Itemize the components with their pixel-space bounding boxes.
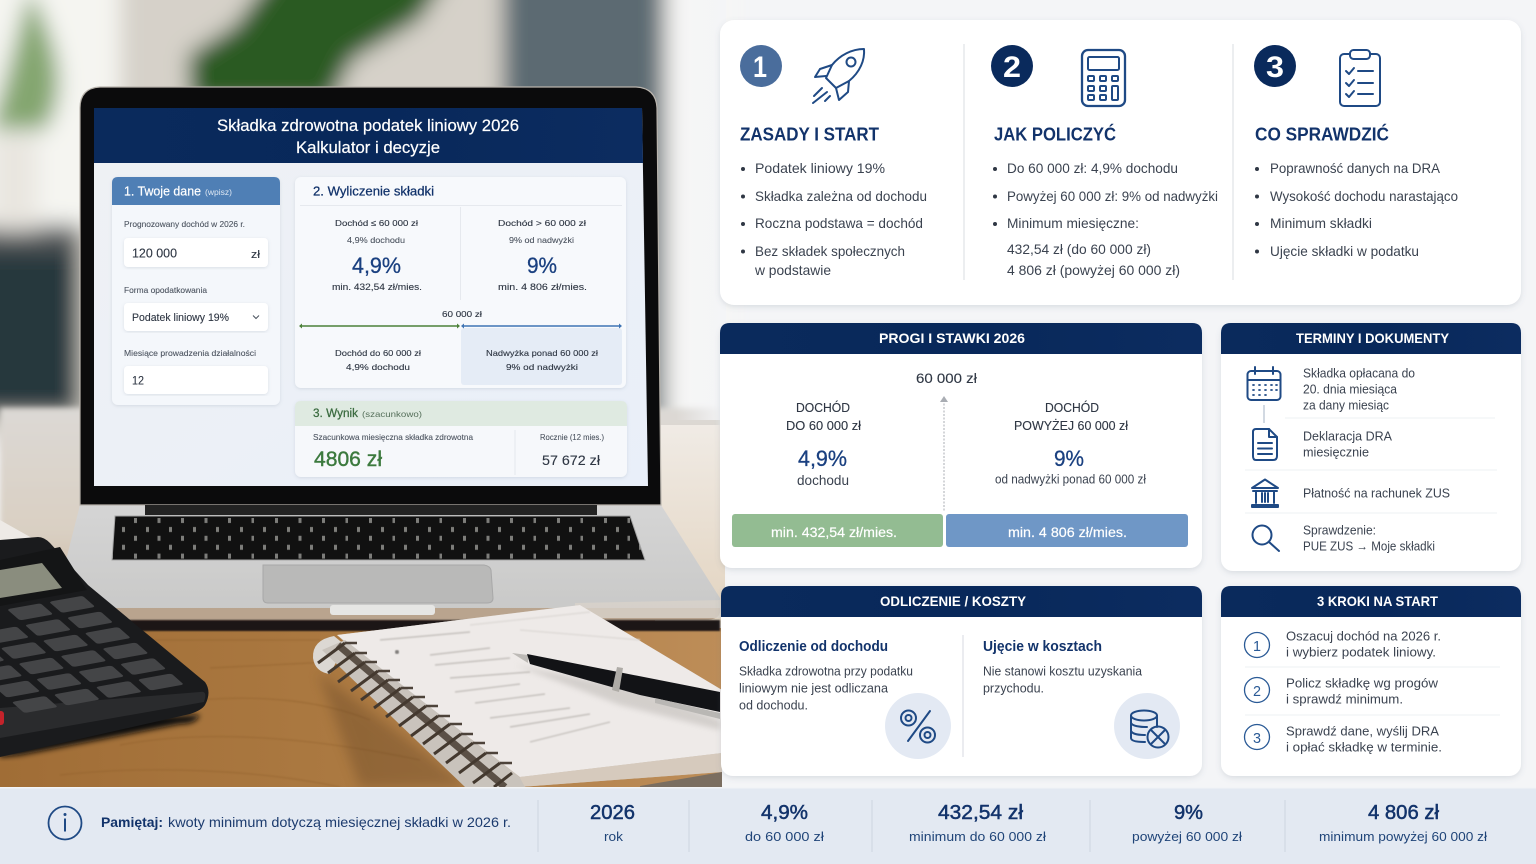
screen panel 3: result: 3. Wynik — [313, 408, 358, 420]
stat: 432,54 zł: 432,54 zł — [938, 802, 1024, 824]
stat: 4,9% — [745, 802, 824, 844]
photo right fade — [676, 0, 726, 420]
screen panel 3: result: 57 672 zł — [542, 452, 601, 468]
column 1: rules and start: ZASADY I START — [740, 124, 879, 144]
screen panel 2: calculation — [295, 177, 626, 388]
screen panel 2: calculation: 4,9% — [352, 253, 401, 278]
laptop — [66, 87, 722, 631]
column 1: rules and start: Roczna podstawa = dochód — [755, 215, 923, 231]
screen panel 2: calculation: 9% — [527, 253, 557, 278]
icon: document — [1253, 429, 1277, 460]
photo: blurred room background — [0, 0, 738, 450]
panel: thresholds and rates: DO 60 000 zł — [786, 418, 861, 433]
photo: table top — [0, 408, 720, 638]
screen panel 3: result: Szacunkowa miesięczna składka zdrowotna — [313, 433, 474, 442]
icon: percent — [885, 693, 951, 759]
column 3: what to check: Ujęcie składki w podatku — [1270, 243, 1419, 259]
screen panel 2: calculation: 9% od nadwyżki — [509, 236, 574, 245]
keyboard — [112, 516, 645, 560]
screen panel 1: your data: Forma opodatkowania — [124, 286, 208, 295]
column 1: rules and start: Bez składek społecznych — [755, 243, 905, 259]
bottom summary bar — [0, 787, 1536, 864]
step 2: i sprawdź minimum. — [1286, 692, 1403, 706]
panel: deduction and costs: od dochodu. — [739, 698, 808, 712]
screen panel 1: your data: Prognozowany dochód w 2026 r. — [124, 220, 245, 229]
column 3: what to check: Minimum składki — [1270, 215, 1372, 231]
panel: thresholds and rates: dochodu — [797, 472, 849, 488]
stat: 4,9%: 4,9% — [761, 802, 808, 824]
panel: deadlines and documents: PUE ZUS → Moje składki — [1303, 540, 1435, 554]
step 3: 3 — [1253, 730, 1261, 747]
stat: 4,9%: do 60 000 zł — [745, 829, 824, 844]
calculator keys — [0, 596, 184, 713]
panel: 3 steps to start — [1221, 586, 1521, 776]
stat: 432,54 zł — [909, 802, 1046, 844]
screen panel 3: result: Rocznie (12 mies.) — [540, 433, 604, 442]
minimum bar: green — [732, 514, 943, 547]
column 1: rules and start: 1 — [753, 51, 767, 84]
panel: thresholds and rates: POWYŻEJ 60 000 zł — [1014, 418, 1128, 433]
column 1: rules and start — [740, 45, 927, 278]
column 3: what to check: CO SPRAWDZIĆ — [1255, 124, 1389, 144]
icon: calendar — [1248, 367, 1280, 400]
minimum bar: blue — [946, 514, 1188, 547]
panel: deduction and costs: ODLICZENIE / KOSZTY — [880, 593, 1027, 609]
screen background — [94, 108, 648, 486]
minimum bar: blue: min. 4 806 zł/mies. — [1008, 524, 1127, 540]
reminder note: Pamiętaj: — [101, 814, 163, 830]
column 2: how to calculate: Minimum miesięczne: — [1007, 215, 1139, 231]
minimum bar: green: min. 432,54 zł/mies. — [771, 524, 897, 540]
column 2: how to calculate: JAK POLICZYĆ — [994, 124, 1116, 144]
laptop screen UI — [94, 108, 648, 486]
column 1: rules and start: Składka zależna od dochodu — [755, 188, 927, 204]
screen panel 2: calculation: 2. Wyliczenie składki — [313, 184, 434, 198]
screen panel 2: calculation: 60 000 zł — [442, 309, 482, 319]
screen panel 3: result: 4806 zł — [314, 448, 382, 471]
step 1: 1 — [1253, 638, 1261, 655]
panel: thresholds and rates: DOCHÓD — [796, 400, 850, 415]
paper sheet on the desk — [0, 520, 32, 540]
photo: desk with laptop, calculator and notebook — [0, 0, 738, 788]
screen panel 3: result — [295, 401, 627, 477]
panel: thresholds and rates: 4,9% — [798, 446, 847, 471]
notebook spine cap — [313, 636, 345, 674]
screen panel 2: calculation: min. 4 806 zł/mies. — [498, 282, 587, 292]
column 2: how to calculate — [991, 45, 1218, 278]
panel: thresholds and rates: PROGI I STAWKI 2026 — [879, 330, 1025, 346]
stat: year — [590, 802, 635, 844]
notebook — [313, 605, 722, 787]
laptop shadow on desk — [120, 620, 720, 631]
screen panel 1: your data: zł — [251, 249, 261, 261]
reminder note: kwoty minimum dotyczą miesięcznej składki w 2026 r. — [168, 814, 511, 830]
stat: 432,54 zł: minimum do 60 000 zł — [909, 829, 1046, 844]
screen panel 2: calculation: 4,9% dochodu — [346, 362, 410, 372]
panel: deadlines and documents: Składka opłacana do — [1303, 366, 1415, 380]
step 3: Sprawdź dane, wyślij DRA — [1286, 724, 1440, 738]
screen title bar: Składka zdrowotna podatek liniowy 2026 — [217, 116, 519, 135]
icon: bank — [1252, 480, 1278, 507]
calculator — [0, 537, 209, 757]
screen panel 2: calculation: Nadwyżka ponad 60 000 zł — [486, 348, 598, 358]
icon: info — [48, 806, 82, 840]
step 2: 2 — [1253, 683, 1261, 700]
panel: deduction and costs: Nie stanowi kosztu uzyskania — [983, 664, 1142, 678]
column 2: how to calculate: Powyżej 60 000 zł: 9% od nadwyżki — [1007, 188, 1218, 204]
panel: deadlines and documents: TERMINY I DOKUMENTY — [1296, 330, 1450, 346]
panel: deadlines and documents: za dany miesiąc — [1303, 398, 1389, 412]
laptop base — [66, 505, 720, 620]
column 1: rules and start: Podatek liniowy 19% — [755, 160, 885, 176]
photo: wooden desk — [0, 628, 722, 788]
step 1 — [1244, 630, 1441, 660]
panel: thresholds and rates: 9% — [1054, 446, 1084, 471]
column 2: how to calculate: 432,54 zł (do 60 000 zł) — [1007, 241, 1151, 257]
panel: 3 steps to start: 3 KROKI NA START — [1317, 593, 1438, 609]
column 2: how to calculate: Do 60 000 zł: 4,9% dochodu — [1007, 160, 1178, 176]
panel: three columns overview — [720, 20, 1521, 305]
step 3: i opłać składkę w terminie. — [1286, 740, 1442, 754]
panel: thresholds and rates: DOCHÓD — [1045, 400, 1099, 415]
column 2: how to calculate: 4 806 zł (powyżej 60 000 zł) — [1007, 262, 1180, 278]
screen panel 2: calculation: Dochód ≤ 60 000 zł — [335, 218, 418, 228]
panel: deadlines and documents: Sprawdzenie: — [1303, 524, 1376, 538]
panel: deduction and costs: liniowym nie jest odliczana — [739, 682, 888, 696]
screen title bar — [94, 108, 643, 163]
calculator front edge highlight — [0, 692, 205, 738]
screen title bar: Kalkulator i decyzje — [296, 138, 440, 157]
screen panel 2: calculation: Dochód do 60 000 zł — [335, 348, 421, 358]
step 3 — [1244, 724, 1442, 754]
panel: thresholds and rates: 60 000 zł — [916, 370, 978, 386]
column 3: what to check: 3 — [1266, 51, 1284, 84]
screen panel 2: calculation: 9% od nadwyżki — [506, 362, 578, 372]
panel: deduction and costs: Składka zdrowotna przy podatku — [739, 664, 913, 678]
screen panel 2: calculation: min. 432,54 zł/mies. — [332, 282, 422, 292]
threshold divider arrow — [940, 396, 948, 512]
screen panel 1: your data: 12 — [132, 374, 144, 388]
column 1: rules and start: w podstawie — [754, 262, 831, 278]
icon: coins crossed — [1114, 693, 1180, 759]
panel: deadlines and documents: 20. dnia miesiąca — [1303, 382, 1397, 396]
screen panel 2: calculation: Dochód > 60 000 zł — [498, 218, 586, 228]
column 3: what to check: Wysokość dochodu narastająco — [1270, 188, 1458, 204]
stat: 4 806 zł: minimum powyżej 60 000 zł — [1319, 829, 1487, 844]
spiral binding — [318, 640, 525, 787]
screen panel 1: your data: 120 000 — [132, 246, 177, 260]
trackpad — [263, 565, 493, 603]
panel: thresholds and rates — [720, 323, 1202, 568]
panel: deadlines and documents: Płatność na rachunek ZUS — [1303, 486, 1450, 500]
panel: thresholds and rates: od nadwyżki ponad 60 000 zł — [995, 472, 1146, 486]
column 3: what to check — [1254, 45, 1458, 259]
stat: 9%: powyżej 60 000 zł — [1132, 829, 1242, 844]
stat: 9% — [1132, 802, 1242, 844]
stat: 4 806 zł: 4 806 zł — [1368, 802, 1440, 824]
handwriting on notebook — [380, 612, 640, 742]
panel: deadlines and documents: miesięcznie — [1303, 446, 1369, 460]
column 2: how to calculate: 2 — [1003, 51, 1021, 84]
screen panel 3: result: (szacunkowo) — [362, 409, 422, 419]
laptop lid — [80, 87, 661, 505]
pen — [512, 653, 720, 730]
panel: deadlines and documents: Deklaracja DRA — [1303, 430, 1393, 444]
panel: deadlines and documents — [1221, 323, 1521, 571]
photo: table top right of laptop — [655, 425, 725, 625]
stat: 9%: 9% — [1174, 802, 1203, 824]
panel: deduction and costs: Odliczenie od dochodu — [739, 639, 888, 655]
screen panel 1: your data: (wpisz) — [205, 187, 232, 197]
screen panel 1: your data: Podatek liniowy 19% — [132, 312, 229, 324]
icon: magnifier — [1252, 526, 1279, 551]
panel: deduction and costs — [721, 586, 1202, 776]
step 1: i wybierz podatek liniowy. — [1286, 646, 1436, 660]
stat: year: rok — [604, 829, 624, 844]
step 2 — [1244, 676, 1439, 706]
screen panel 1: your data — [112, 177, 280, 405]
hinge notch — [330, 605, 435, 615]
screen panel 1: your data: Miesiące prowadzenia działalności — [124, 349, 256, 358]
panel: deduction and costs: Ujęcie w kosztach — [983, 639, 1102, 655]
screen panel 1: your data: 1. Twoje dane — [124, 184, 201, 198]
column 3: what to check: Poprawność danych na DRA — [1270, 160, 1441, 176]
step 1: Oszacuj dochód na 2026 r. — [1286, 630, 1441, 644]
stat: year: 2026 — [590, 802, 635, 824]
stat: 4 806 zł — [1319, 802, 1487, 844]
calculator display — [0, 563, 62, 598]
screen panel 2: calculation: 4,9% dochodu — [347, 236, 405, 245]
panel: deduction and costs: przychodu. — [983, 682, 1044, 696]
step 2: Policz składkę wg progów — [1286, 676, 1439, 690]
